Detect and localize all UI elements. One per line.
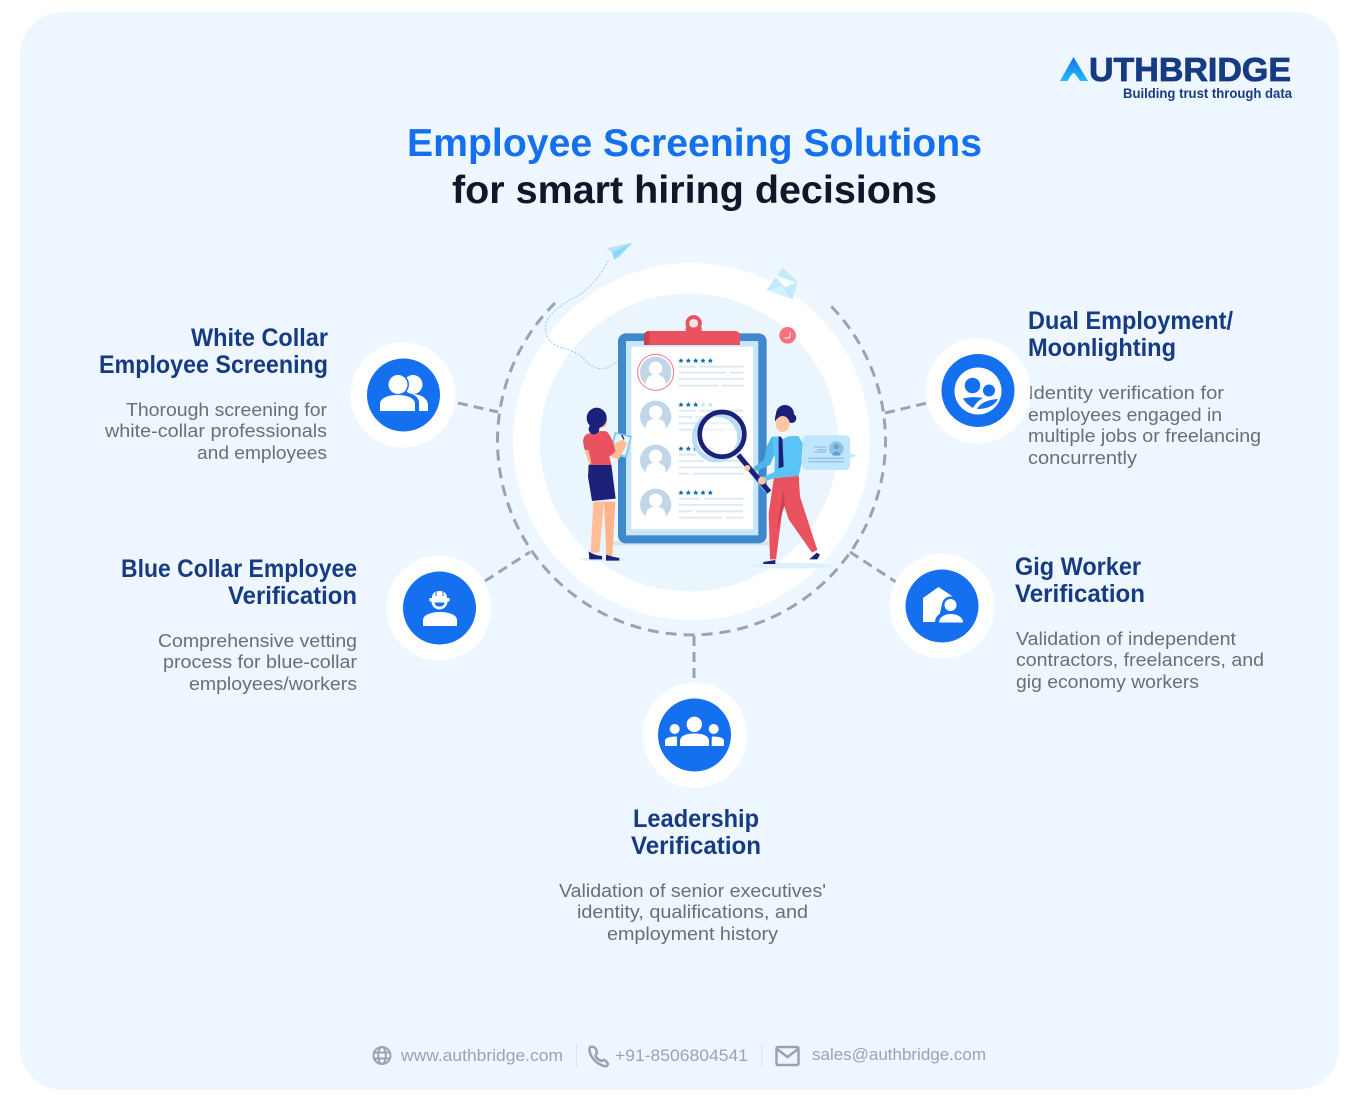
description [1016, 628, 1264, 692]
heading [121, 555, 357, 610]
heading [631, 805, 761, 860]
phone: +91-8506804541 [615, 1046, 748, 1065]
magnifying glass [694, 412, 769, 492]
clipboard [613, 317, 770, 545]
title [407, 122, 982, 212]
description: Thorough screening for [126, 399, 327, 420]
icon: worker with hard hat [386, 556, 492, 660]
dashed arc and connectors [458, 303, 927, 682]
description [104, 399, 327, 463]
envelope [767, 268, 798, 299]
woman figure [581, 408, 632, 561]
avatars [640, 357, 671, 520]
title line 2: for smart hiring decisions [452, 169, 937, 212]
item: blue collar [121, 555, 492, 694]
heading: Verification [228, 582, 357, 610]
heading [99, 324, 328, 379]
check badge [779, 327, 796, 344]
description: concurrently [1028, 447, 1138, 468]
heading: White Collar [191, 324, 328, 352]
description: employees engaged in [1028, 404, 1222, 425]
central rings [513, 263, 870, 620]
description: Validation of senior executives' [559, 880, 826, 901]
item: dual employment [926, 307, 1261, 468]
description: and employees [197, 442, 327, 463]
heading: Leadership [633, 805, 759, 833]
description [1028, 382, 1261, 468]
icon: people in circle [926, 338, 1030, 444]
description: contractors, freelancers, and [1016, 649, 1264, 670]
paper plane and trail [545, 243, 632, 369]
text lines [679, 367, 743, 518]
man figure [744, 405, 833, 569]
heading: Verification [1015, 580, 1145, 608]
heading: Blue Collar Employee [121, 555, 357, 583]
logo [1060, 51, 1292, 101]
highlight ring [638, 354, 674, 390]
candidate rows [638, 354, 743, 520]
description: Validation of independent [1016, 628, 1236, 649]
item: leadership [559, 683, 826, 944]
star ratings [678, 358, 713, 495]
description: Identity verification for [1028, 382, 1224, 403]
icon: group of people [642, 683, 748, 788]
item: gig worker [890, 553, 1264, 692]
heading: Moonlighting [1028, 334, 1176, 362]
heading: Employee Screening [99, 351, 328, 379]
description: employment history [607, 923, 779, 944]
title line 1: Employee Screening Solutions [407, 122, 982, 165]
description: identity, qualifications, and [577, 901, 808, 922]
description: employees/workers [189, 673, 357, 694]
logo wordmark: UTHBRIDGE [1089, 51, 1291, 88]
inner light circle [540, 294, 838, 592]
logo tagline: Building trust through data [1123, 85, 1292, 101]
description: multiple jobs or freelancing [1028, 425, 1261, 446]
heading: Dual Employment/ [1028, 307, 1233, 335]
description: Comprehensive vetting [158, 630, 357, 651]
heading [1015, 553, 1145, 608]
heading: Gig Worker [1015, 553, 1141, 581]
item: white collar [99, 324, 456, 463]
icon: house and person [890, 554, 994, 658]
id card bubble [802, 435, 857, 470]
email: sales@authbridge.com [812, 1045, 986, 1064]
heading: Verification [631, 832, 761, 860]
description: gig economy workers [1016, 671, 1199, 692]
heading [1028, 307, 1233, 362]
logo mark [1060, 57, 1088, 81]
website: www.authbridge.com [400, 1046, 563, 1065]
icon: two people [350, 342, 456, 448]
central illustration [545, 243, 857, 569]
description [559, 880, 826, 944]
outer white ring [513, 263, 870, 620]
description: white-collar professionals [104, 420, 327, 441]
description: process for blue-collar [163, 651, 357, 672]
footer contact bar [374, 1044, 986, 1067]
description [158, 630, 357, 694]
